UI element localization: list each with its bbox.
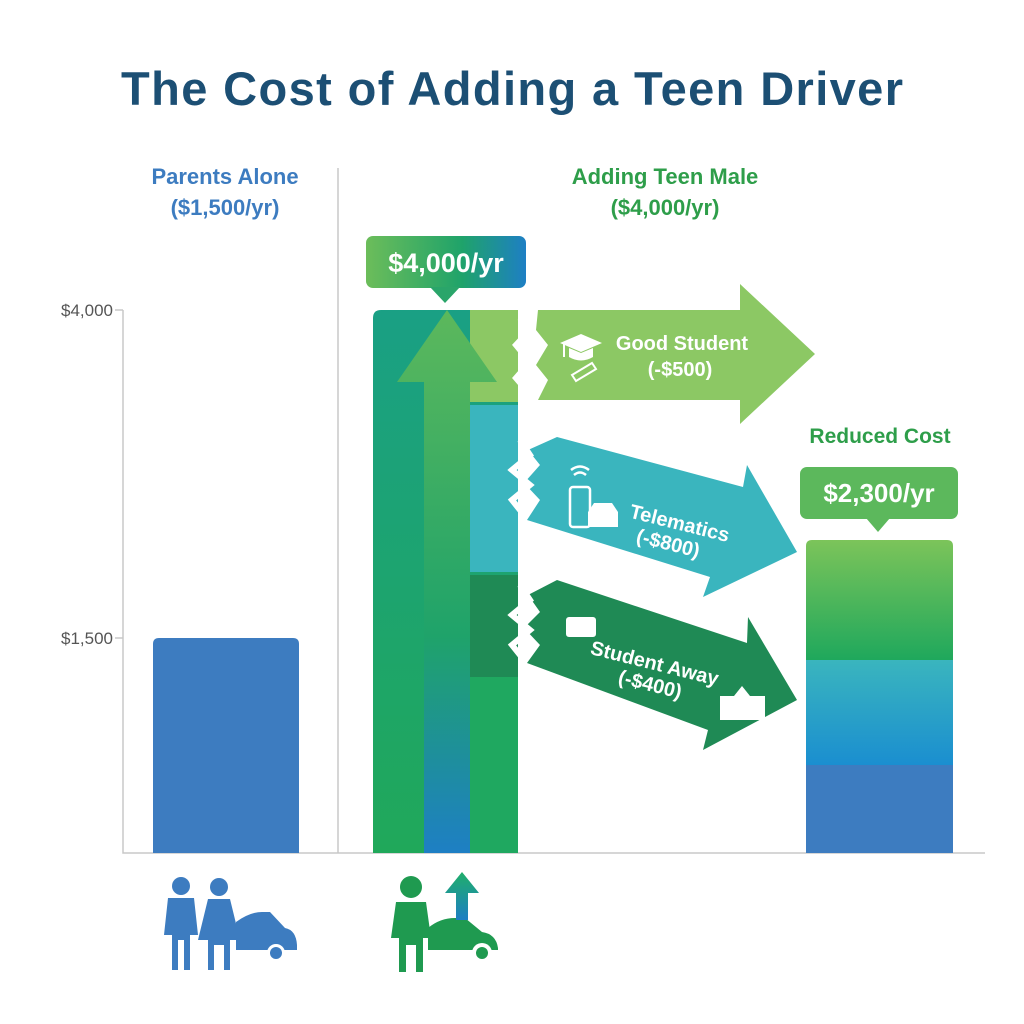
icon: phone and car (570, 466, 590, 527)
arrow: up (397, 310, 497, 853)
heading: parents alone (151, 164, 299, 220)
arrow: good student: Good Student (616, 333, 748, 355)
icon: suitcase (566, 617, 596, 637)
axes (115, 168, 985, 853)
callout: $2,300/yr (800, 467, 958, 532)
heading: parents alone: ($1,500/yr) (171, 195, 279, 220)
icon: school (720, 686, 765, 720)
axis labels (61, 301, 113, 648)
arrow: student away (512, 580, 797, 750)
arrow: telematics: (-$800) (634, 526, 702, 562)
arrow: telematics: Telematics (627, 501, 732, 547)
callout: $4,000/yr: $4,000/yr (388, 248, 504, 278)
arrow: good student (516, 284, 815, 424)
icon: graduation cap (560, 334, 602, 381)
icon: teen with car and up arrow (391, 872, 498, 972)
heading: parents alone: Parents Alone (151, 164, 299, 189)
heading: adding teen male (572, 164, 758, 220)
arrow: telematics (512, 437, 797, 597)
bar: parents alone (153, 638, 299, 853)
arrow: student away: Student Away (588, 637, 722, 691)
arrow: student away: (-$400) (616, 667, 684, 703)
heading: adding teen male: Adding Teen Male (572, 164, 758, 189)
axis labels: $4,000 (61, 301, 113, 320)
icon: parents with car (164, 877, 297, 970)
arrow: good student: (-$500) (648, 359, 712, 381)
bar: reduced cost (806, 540, 953, 853)
bar: teen male total (373, 310, 518, 853)
heading: reduced cost: Reduced Cost (809, 425, 951, 448)
title: The Cost of Adding a Teen Driver (121, 62, 903, 115)
axis labels: $1,500 (61, 629, 113, 648)
callout: $4,000/yr (366, 236, 526, 303)
heading: adding teen male: ($4,000/yr) (611, 195, 719, 220)
callout: $2,300/yr: $2,300/yr (823, 478, 935, 508)
